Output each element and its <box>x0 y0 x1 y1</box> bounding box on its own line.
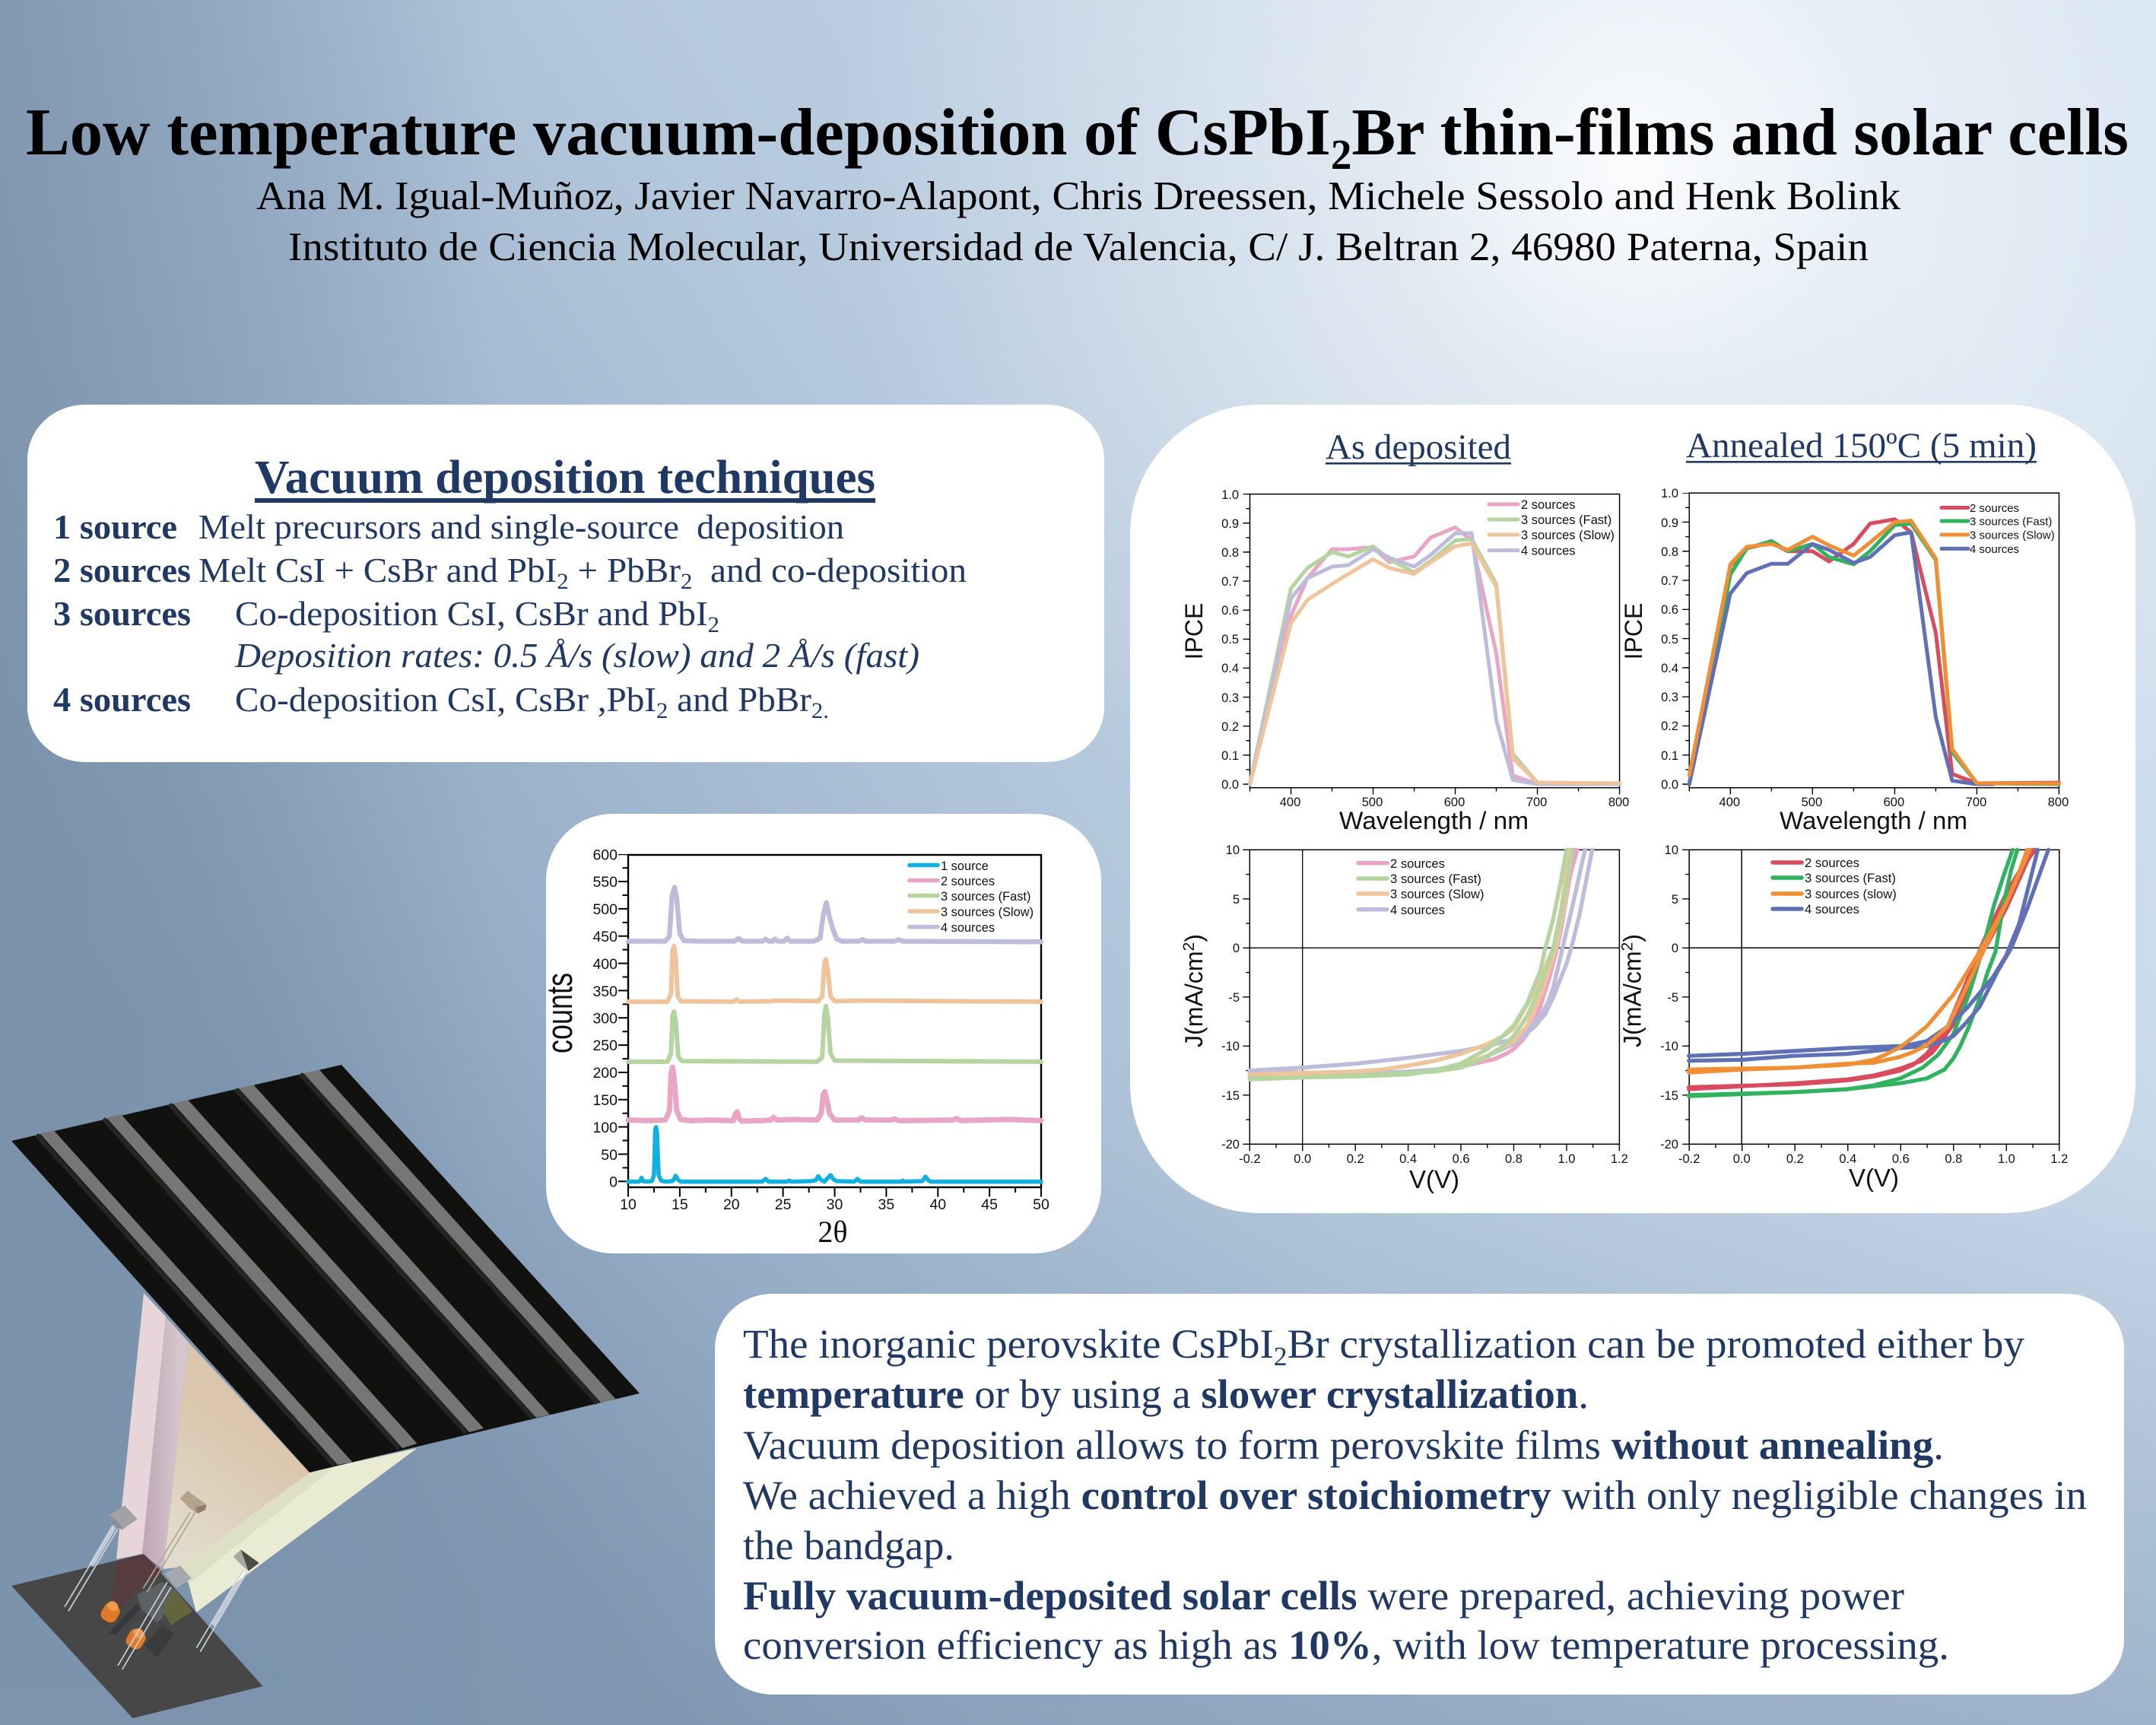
chart: IPCE as deposited: 0.6 <box>1221 604 1239 618</box>
axis title: J: ) <box>1180 934 1208 942</box>
heading: Vacuum deposition techniques <box>255 452 875 504</box>
panel: XRD chart: 0 <box>609 1174 618 1191</box>
chart: IPCE annealed: 0.7 <box>1661 574 1678 588</box>
legend <box>1942 502 2055 556</box>
axis title: V: V(V) <box>1849 1164 1899 1192</box>
legend <box>910 859 1034 935</box>
chart: JV as deposited: 0.8 <box>1505 1152 1523 1166</box>
chart: JV annealed <box>1618 843 2068 1192</box>
panel: XRD chart: 600 <box>592 847 618 864</box>
chart: JV as deposited: -10 <box>1221 1040 1240 1053</box>
chart: JV annealed: -10 <box>1660 1040 1678 1053</box>
legend: 4 sources <box>1521 545 1576 558</box>
chart: JV as deposited: 0.6 <box>1453 1152 1470 1166</box>
axis title: counts: counts <box>539 973 579 1053</box>
chart: IPCE as deposited: 0.5 <box>1221 633 1239 646</box>
row: 3 sources: 2 <box>708 612 719 637</box>
legend: 2 sources <box>941 875 995 888</box>
chart: IPCE annealed: 0.3 <box>1661 691 1678 704</box>
axis title: J: J(mA/cm <box>1618 951 1646 1047</box>
title: Br thin-films and solar cells <box>1351 96 2129 170</box>
curves <box>1689 850 2048 1096</box>
substrate with stripes <box>11 1065 640 1472</box>
legend: 2 sources <box>1970 502 2019 515</box>
panel: XRD chart: 15 <box>672 1196 688 1213</box>
panel: XRD chart: 25 <box>775 1196 792 1213</box>
panel: conclusions: Vacuum deposition allows to form perovskite films without annealing. <box>743 1422 1944 1468</box>
chart: IPCE annealed: 0.4 <box>1661 662 1678 675</box>
legend: 3 sources (Fast) <box>1521 513 1611 527</box>
legend: 2 sources <box>1521 498 1576 512</box>
chart: JV annealed: 10 <box>1665 843 1678 857</box>
chart: JV annealed: 5 <box>1672 893 1678 907</box>
chart: IPCE as deposited: 600 <box>1444 796 1465 809</box>
chart: JV annealed: 1.0 <box>1998 1152 2015 1166</box>
chart: JV annealed: 0.4 <box>1839 1152 1856 1166</box>
chart: JV annealed: 0.2 <box>1786 1152 1804 1166</box>
legend: 3 sources (Fast) <box>1390 872 1481 886</box>
illustration: vacuum deposition device <box>11 1065 640 1718</box>
chart: JV annealed: -15 <box>1660 1089 1678 1103</box>
legend: 3 sources (Fast) <box>1970 516 2052 528</box>
heading: annealed: Annealed 150ºC (5 min) <box>1686 426 2037 465</box>
row: 3 sources: Co-deposition CsI, CsBr and PbI <box>235 594 697 633</box>
chart: IPCE as deposited: 0.1 <box>1221 749 1239 763</box>
row: 4 sources: Co-deposition CsI, CsBr ,PbI <box>235 680 646 719</box>
row: 2 sources: 2 <box>557 569 569 594</box>
row: 4 sources: and PbBr <box>668 680 811 719</box>
row: 1 source: 1 source <box>53 507 177 546</box>
chart: IPCE annealed <box>1620 487 2069 834</box>
legend <box>1489 498 1615 558</box>
axis title: J: J(mA/cm <box>1180 951 1208 1047</box>
legend: 4 sources <box>1390 903 1445 917</box>
panel: XRD chart: 400 <box>592 956 618 973</box>
legend: 4 sources <box>941 921 995 935</box>
panel: XRD chart: 300 <box>592 1011 618 1028</box>
legend: 3 sources (Slow) <box>1970 529 2055 542</box>
panel: XRD chart: 50 <box>601 1147 618 1164</box>
chart: IPCE annealed: 0.0 <box>1661 778 1678 792</box>
row: 4 sources: 4 sources <box>53 680 191 719</box>
row: 4 sources: 2 <box>656 698 668 723</box>
source shadow areas <box>109 1554 192 1658</box>
axis title: IPCE: IPCE <box>1180 603 1208 659</box>
panel: conclusions: Fully vacuum-deposited solar cells were prepared, achieving power <box>743 1573 1904 1619</box>
crucible left <box>99 1600 122 1625</box>
chart: JV as deposited: 5 <box>1233 893 1240 907</box>
chart: JV as deposited: -0.2 <box>1239 1152 1261 1166</box>
panel: XRD chart: 100 <box>592 1120 618 1136</box>
affiliation: Instituto de Ciencia Molecular, Universidad de Valencia, C/ J. Beltran 2, 46980 Paterna, Spain <box>288 225 1869 269</box>
panel: vacuum deposition techniques <box>27 405 1104 762</box>
chart: IPCE annealed: 0.2 <box>1661 720 1678 733</box>
chart: JV annealed: 0.0 <box>1733 1152 1751 1166</box>
panel: XRD chart: 450 <box>592 929 618 945</box>
curves <box>628 888 1041 1182</box>
title: 2 <box>1331 132 1351 179</box>
chart: IPCE annealed: 400 <box>1719 796 1740 809</box>
crucible right <box>124 1626 148 1652</box>
chart: JV as deposited: 0.4 <box>1399 1152 1417 1166</box>
chart: IPCE as deposited: 500 <box>1362 796 1383 809</box>
curves <box>1249 850 1592 1079</box>
chart: JV as deposited: -20 <box>1221 1138 1240 1152</box>
axis title: wavelength: Wavelength / nm <box>1780 807 1967 834</box>
chart: JV as deposited: 0.0 <box>1294 1152 1311 1166</box>
panel: XRD chart: 50 <box>1033 1196 1049 1213</box>
row: 3 sources: Deposition rates: 0.5 Å/s (slow) and 2 Å/s (fast) <box>234 636 919 675</box>
chart: IPCE annealed: 0.8 <box>1661 545 1678 559</box>
row: 2 sources <box>53 551 967 594</box>
legend: 3 sources (Fast) <box>1805 871 1896 885</box>
legend <box>1358 856 1484 917</box>
legend: 2 sources <box>1805 856 1859 870</box>
panel: XRD chart: 150 <box>592 1092 618 1109</box>
chart: IPCE as deposited: 0.7 <box>1221 575 1239 589</box>
legend: 3 sources (slow) <box>1805 887 1897 901</box>
chart: JV as deposited: 10 <box>1226 843 1240 857</box>
panel: XRD chart: 250 <box>592 1037 618 1054</box>
legend: 3 sources (Fast) <box>941 890 1030 904</box>
chart: IPCE annealed: 0.1 <box>1661 749 1678 763</box>
chart: JV annealed: 0.8 <box>1945 1152 1962 1166</box>
panel: XRD chart: 20 <box>723 1196 740 1213</box>
curves <box>1689 519 2059 784</box>
panel: XRD chart: 10 <box>620 1196 637 1213</box>
legend: 3 sources (Slow) <box>1521 529 1615 542</box>
heading: as deposited: As deposited <box>1326 427 1511 467</box>
panel: XRD chart: 45 <box>981 1196 998 1213</box>
title: Low temperature vacuum-deposition of CsPbI <box>26 96 1352 170</box>
chart: IPCE as deposited: 0.2 <box>1221 720 1239 734</box>
base plate <box>11 1554 263 1718</box>
chart: IPCE annealed: 800 <box>2048 796 2069 809</box>
panel: XRD chart: 35 <box>878 1196 894 1213</box>
chart: JV as deposited: -5 <box>1228 991 1240 1005</box>
panel: conclusions: temperature or by using a slower crystallization. <box>743 1371 1589 1417</box>
panel: conclusions: The inorganic perovskite CsPbI <box>743 1321 1263 1367</box>
chart: JV as deposited: 1.0 <box>1558 1152 1575 1166</box>
chart: IPCE annealed: 600 <box>1884 796 1904 809</box>
chart: JV annealed: 0 <box>1672 942 1678 955</box>
row: 3 sources <box>53 594 919 675</box>
panel: photovoltaic charts <box>1130 405 2135 1213</box>
chart: JV annealed: -5 <box>1667 991 1678 1005</box>
legend: 2 sources <box>1390 856 1445 871</box>
authors: Ana M. Igual-Muñoz, Javier Navarro-Alapont, Chris Dreessen, Michele Sessolo and Henk Bolink <box>256 174 1901 218</box>
panel: XRD chart: 40 <box>929 1196 946 1213</box>
panel: XRD chart: 30 <box>827 1196 843 1213</box>
axis title: two theta: 2θ <box>818 1215 848 1249</box>
legend: 4 sources <box>1805 902 1859 917</box>
chart: IPCE as deposited: 0.8 <box>1221 546 1239 560</box>
curves <box>1250 527 1620 784</box>
row: 3 sources: 3 sources <box>53 594 191 633</box>
sources and sensors <box>65 1491 259 1669</box>
axis title: IPCE: IPCE <box>1620 603 1647 659</box>
axis title: J: 2 <box>1618 942 1637 951</box>
legend: 1 source <box>941 859 989 873</box>
axis title: J: ) <box>1618 934 1646 942</box>
sensor cubes <box>110 1491 259 1588</box>
panel: conclusions: We achieved a high control over stoichiometry with only negligible changes in <box>743 1472 2087 1518</box>
chart: JV as deposited: 0.2 <box>1347 1152 1364 1166</box>
chart: IPCE as deposited: 0.3 <box>1221 691 1239 705</box>
chart: JV as deposited: 0 <box>1233 942 1240 955</box>
title block <box>26 96 2129 269</box>
row: 2 sources: + PbBr <box>569 551 681 589</box>
panel: conclusions: Br crystallization can be promoted either by <box>1288 1321 2024 1367</box>
legend: 4 sources <box>1970 543 2019 556</box>
chart: JV annealed: 0.6 <box>1892 1152 1910 1166</box>
chart: IPCE as deposited: 400 <box>1280 796 1300 809</box>
chart: JV annealed: -20 <box>1660 1138 1678 1152</box>
panel: XRD chart <box>539 814 1101 1253</box>
chart: IPCE as deposited: 0.0 <box>1221 778 1239 792</box>
chart: IPCE annealed: 700 <box>1966 796 1986 809</box>
legend <box>1773 856 1897 917</box>
row: 1 source: Melt precursors and single-source deposition <box>198 507 844 546</box>
row: 2 sources: Melt CsI + CsBr and PbI <box>198 551 548 589</box>
row: 2 sources: 2 sources <box>53 551 191 589</box>
chart: IPCE annealed: 0.6 <box>1661 603 1678 617</box>
chart: IPCE as deposited: 0.9 <box>1221 517 1239 531</box>
panel: XRD chart: 550 <box>592 874 618 891</box>
panel: XRD chart: 350 <box>592 983 618 1000</box>
chart: IPCE annealed: 500 <box>1802 796 1822 809</box>
chart: IPCE as deposited <box>1180 488 1629 834</box>
panel: conclusions: the bandgap. <box>743 1523 954 1568</box>
row: 4 sources <box>53 680 829 723</box>
panel: conclusions <box>715 1294 2124 1695</box>
chart: IPCE annealed: 0.5 <box>1661 633 1678 646</box>
axis title: J: 2 <box>1180 942 1198 951</box>
panel: conclusions: 2 <box>1274 1342 1288 1371</box>
chart: IPCE as deposited: 700 <box>1526 796 1547 809</box>
axis title: V: V(V) <box>1409 1165 1459 1193</box>
chart: JV annealed: 1.2 <box>2050 1152 2068 1166</box>
chart: JV as deposited <box>1180 843 1628 1193</box>
chart: IPCE as deposited: 800 <box>1608 796 1629 809</box>
axis title: wavelength: Wavelength / nm <box>1339 807 1529 834</box>
row: 2 sources: 2 <box>681 569 692 594</box>
chart: IPCE as deposited: 1.0 <box>1221 488 1239 502</box>
chart: JV as deposited: 1.2 <box>1611 1152 1628 1166</box>
chart: IPCE annealed: 0.9 <box>1661 516 1678 530</box>
chart: JV annealed: -0.2 <box>1678 1152 1700 1166</box>
panel: conclusions: conversion efficiency as high as 10%, with low temperature processing. <box>743 1622 1949 1668</box>
row: 4 sources: 2. <box>811 698 829 723</box>
chart: JV as deposited: -15 <box>1221 1089 1240 1103</box>
legend: 3 sources (Slow) <box>941 905 1034 919</box>
chart: IPCE as deposited: 0.4 <box>1221 662 1239 675</box>
vapor cones <box>116 1293 417 1612</box>
chart: IPCE annealed: 1.0 <box>1661 487 1678 500</box>
panel: XRD chart: 200 <box>592 1065 618 1082</box>
legend: 3 sources (Slow) <box>1390 887 1484 901</box>
panel: XRD chart: 500 <box>592 901 618 918</box>
row: 2 sources: and co-deposition <box>692 551 967 589</box>
sensor rods <box>65 1512 247 1669</box>
